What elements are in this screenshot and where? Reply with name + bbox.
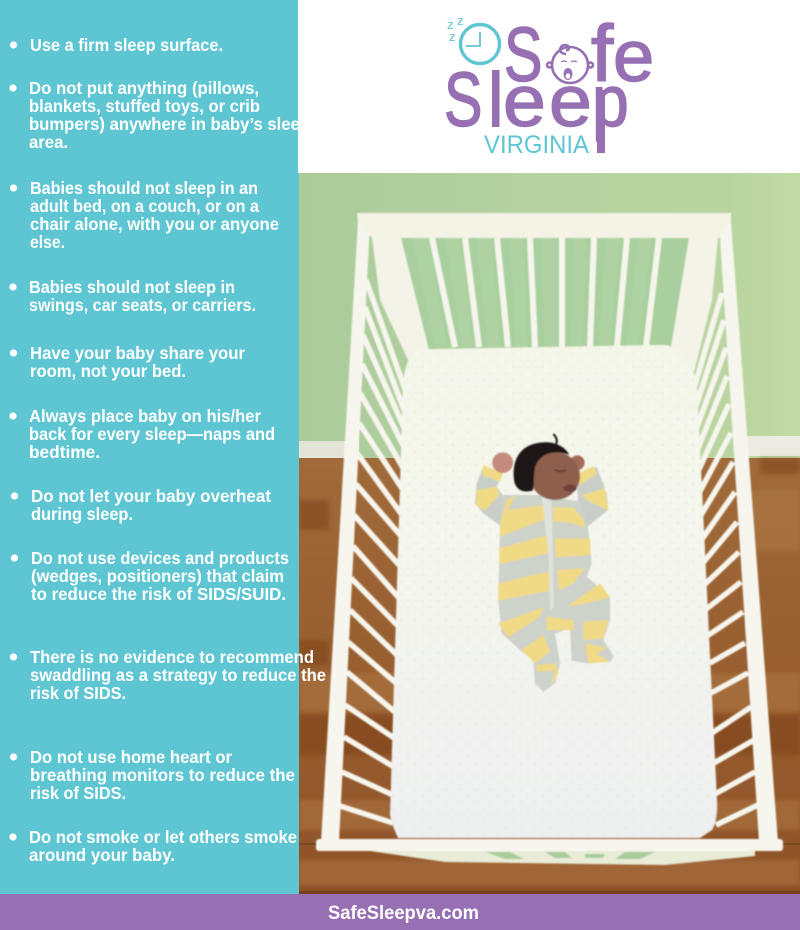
- tip: swaddling: [30, 647, 326, 703]
- logo word: Sleep: [444, 58, 629, 153]
- tip: no swings or car seats: swings, car seats, or carriers.: [29, 295, 256, 315]
- crib back slats: [432, 238, 659, 347]
- hands: [492, 452, 585, 473]
- tip: home monitors: breathing monitors to reduce the: [30, 765, 295, 785]
- tip: no smoking: Do not smoke or let others smoke: [29, 827, 297, 847]
- logo word: Safe: f: [591, 9, 614, 98]
- tip: no swings or car seats: Babies should not sleep in: [29, 277, 235, 297]
- logo word: Sleep: e: [549, 61, 592, 141]
- tip: keep sleep area empty: bumpers) anywhere in baby’s sleep: [29, 114, 310, 134]
- panel: logo background: [298, 0, 800, 173]
- tip: avoid overheating: during sleep.: [31, 504, 133, 524]
- far slats seen under front rail: [370, 851, 755, 865]
- tip: no adult beds or couches: [30, 178, 279, 252]
- icon: sleeping z letters: z: [447, 17, 454, 32]
- crib top rail: [357, 213, 731, 238]
- crib front rail: [316, 839, 783, 851]
- tip: keep sleep area empty: blankets, stuffed toys, or crib: [29, 96, 260, 116]
- icon: sleeping z letters: [447, 13, 464, 44]
- footer bar: [0, 894, 800, 930]
- tip: share room not bed: [30, 343, 245, 381]
- tip: keep sleep area empty: area.: [29, 132, 68, 152]
- icon: sleeping z letters: z: [457, 13, 464, 28]
- tip: no devices or wedges: to reduce the risk of SIDS/SUID.: [31, 584, 286, 604]
- left arm: [475, 465, 505, 527]
- crib right slats: [692, 293, 758, 825]
- tip: no smoking: around your baby.: [29, 845, 175, 865]
- mattress: [390, 345, 717, 838]
- tip: back to sleep: [29, 406, 275, 462]
- crib right post: [719, 222, 778, 842]
- tip: no devices or wedges: [31, 548, 289, 604]
- tip: no adult beds or couches: chair alone, with you or anyone: [30, 214, 279, 234]
- tip: share room not bed: Have your baby share your: [30, 343, 245, 363]
- tip: home monitors: risk of SIDS.: [30, 783, 126, 803]
- logo word: Sleep: S: [444, 58, 482, 143]
- logo: Safe Sleep Virginia: [444, 9, 654, 159]
- tip: firm sleep surface: Use a firm sleep surface.: [30, 35, 223, 55]
- bullet markers: [9, 41, 18, 841]
- tip: no smoking: [29, 827, 297, 865]
- tip: share room not bed: room, not your bed.: [30, 361, 186, 381]
- tip: no swings or car seats: [29, 277, 256, 315]
- crib inner side panels: [372, 238, 718, 372]
- tip: home monitors: [30, 747, 295, 803]
- photo: baby sleeping alone in crib: [299, 173, 800, 894]
- tip: back to sleep: bedtime.: [29, 442, 100, 462]
- logo word: Virginia: VIRGINIA: [484, 131, 589, 159]
- icon: clock: [460, 24, 500, 64]
- icon: sleeping z letters: z: [449, 29, 456, 44]
- icon: baby face: [547, 45, 593, 83]
- tip: no adult beds or couches: adult bed, on a couch, or on a: [30, 196, 259, 216]
- logo word: Safe: S: [504, 13, 542, 98]
- tip: swaddling: There is no evidence to recommend: [30, 647, 314, 667]
- logo word: Safe: e: [613, 17, 654, 97]
- crib left slats: [340, 280, 407, 823]
- head: [514, 434, 580, 500]
- tip: back to sleep: back for every sleep—naps and: [29, 424, 275, 444]
- tip: avoid overheating: Do not let your baby overheat: [31, 486, 271, 506]
- tip: no adult beds or couches: Babies should not sleep in an: [30, 178, 258, 198]
- logo word: Sleep: e: [503, 61, 546, 141]
- tip: no devices or wedges: (wedges, positioners) that claim: [31, 566, 284, 586]
- right arm: [575, 466, 608, 527]
- tip: swaddling: risk of SIDS.: [30, 683, 126, 703]
- tip: keep sleep area empty: Do not put anything (pillows,: [29, 78, 259, 98]
- crib left post: [321, 222, 370, 842]
- baby: [475, 434, 614, 692]
- footer website text: SafeSleepva.com: [328, 903, 479, 924]
- logo word: Safe: [504, 9, 654, 98]
- tip: back to sleep: Always place baby on his/her: [29, 406, 261, 426]
- tip: no adult beds or couches: else.: [30, 232, 65, 252]
- panel: teal tips background: [0, 0, 299, 894]
- logo word: Sleep: p: [592, 60, 629, 142]
- crib back opening: [401, 238, 689, 350]
- tip: home monitors: Do not use home heart or: [30, 747, 232, 767]
- tip: keep sleep area empty: [29, 78, 310, 152]
- tip: no devices or wedges: Do not use devices and products: [31, 548, 289, 568]
- sleeper: [498, 495, 614, 692]
- tip: swaddling: swaddling as a strategy to reduce the: [30, 665, 326, 685]
- tip: avoid overheating: [31, 486, 271, 524]
